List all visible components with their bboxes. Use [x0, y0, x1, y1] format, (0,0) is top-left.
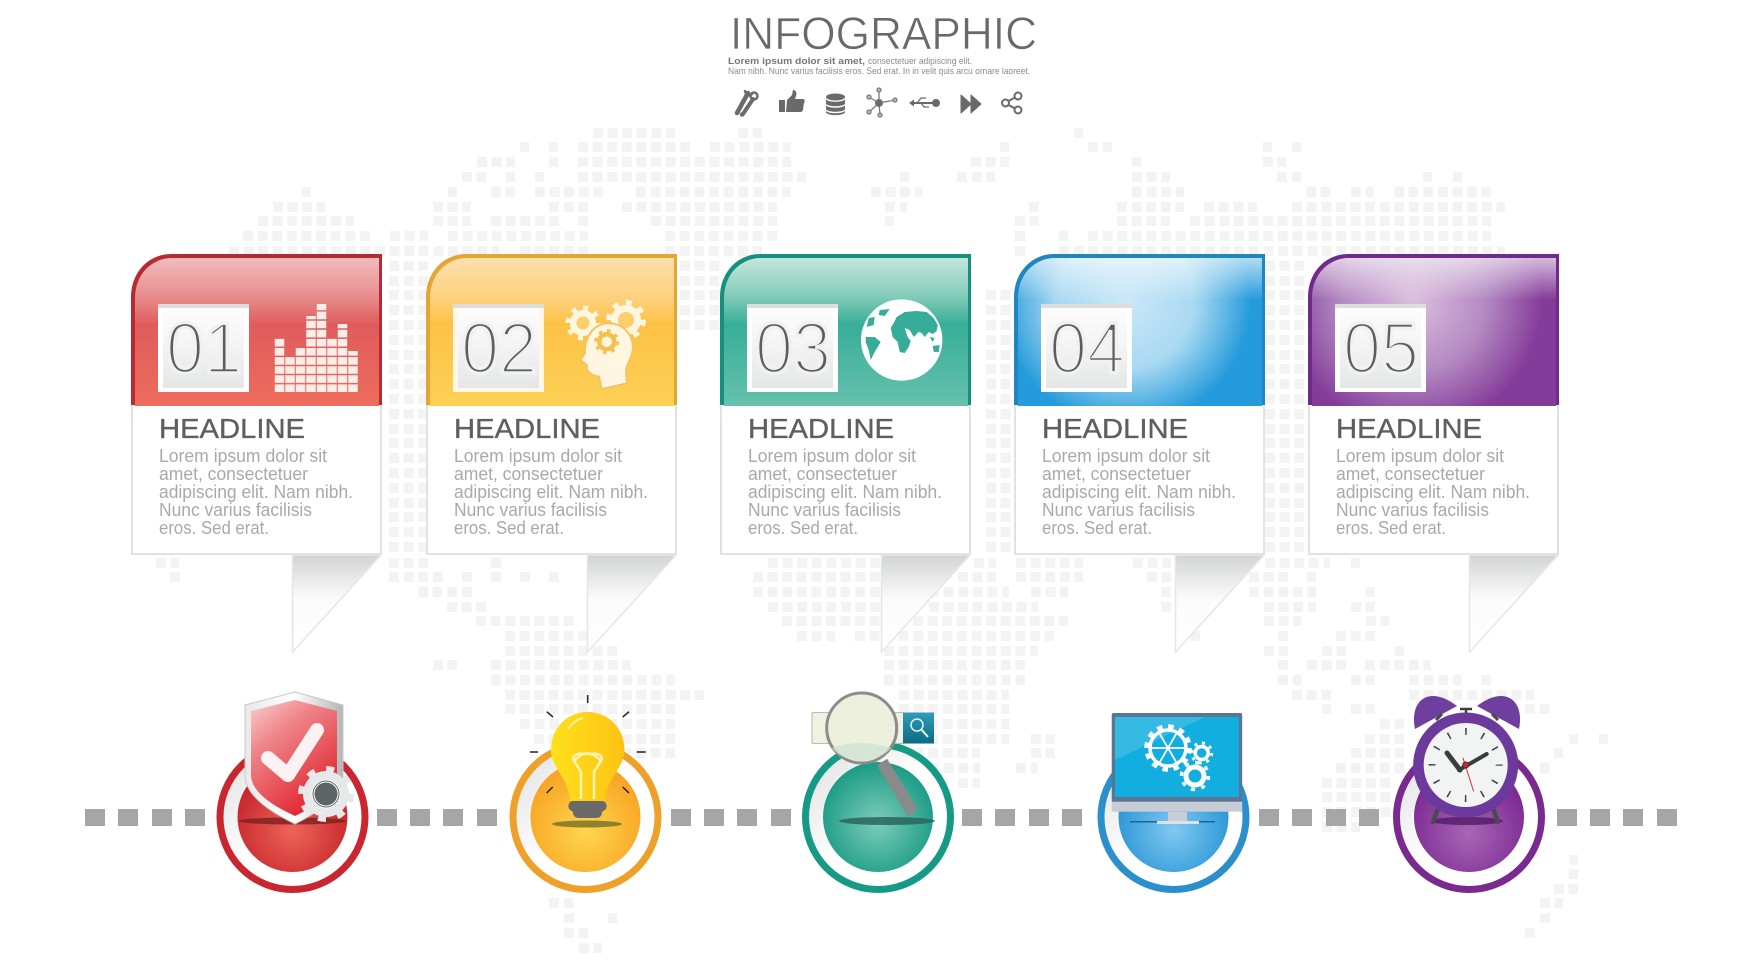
title: INFOGRAPHIC: [730, 8, 1037, 59]
body text: [454, 446, 648, 538]
body text: Lorem ipsum dolor sit: [454, 446, 622, 466]
panel 01: [131, 254, 382, 652]
icon: gear: [301, 769, 351, 819]
header: [720, 254, 971, 405]
header: [1308, 254, 1559, 405]
header: [426, 254, 677, 405]
icon: database: [826, 94, 845, 115]
node 3: magnifier: [806, 693, 950, 890]
number box: 04: [1049, 309, 1125, 389]
number box: 01: [166, 309, 242, 389]
body text: Lorem ipsum dolor sit: [159, 446, 327, 466]
icon: share: [1002, 92, 1022, 114]
headline: HEADLINE: [454, 413, 600, 444]
body text: Lorem ipsum dolor sit: [748, 446, 916, 466]
body text: amet, consectetuer: [748, 464, 897, 484]
body text: Nunc varius facilisis: [1336, 500, 1489, 520]
body text: eros. Sed erat.: [1042, 518, 1152, 538]
pointer tail: [882, 555, 970, 652]
number box: 03: [755, 309, 831, 389]
pointer tail: [1176, 555, 1264, 652]
body text: eros. Sed erat.: [1336, 518, 1446, 538]
header: [1014, 254, 1265, 405]
icon: fast forward: [961, 95, 981, 113]
node 1: shield: [220, 692, 365, 890]
icon: wrenches: [737, 91, 758, 116]
body text: adipiscing elit. Nam nibh.: [748, 482, 942, 502]
header: [131, 254, 382, 405]
dashed timeline: [85, 809, 1677, 826]
icon: clock face: [1413, 712, 1518, 818]
panel body: [427, 405, 676, 554]
headline: HEADLINE: [1042, 413, 1188, 444]
subtitle: Lorem ipsum dolor sit amet,: [728, 56, 865, 67]
panel body: [132, 405, 381, 554]
icon: magnifying glass: [827, 693, 913, 813]
headline: HEADLINE: [159, 413, 305, 444]
icon: shield with check: [245, 692, 343, 824]
panel body: [1015, 405, 1264, 554]
node 5: alarm clock: [1396, 696, 1542, 890]
icon: laptop: [1112, 713, 1242, 824]
body text: Nunc varius facilisis: [159, 500, 312, 520]
icon: rays: [530, 695, 646, 793]
body text: amet, consectetuer: [1336, 464, 1485, 484]
body text: [159, 446, 353, 538]
icon: clock bells and feet: [1414, 696, 1520, 822]
icon: screen gears: [1146, 726, 1212, 790]
icon: network: [867, 88, 897, 117]
body text: adipiscing elit. Nam nibh.: [454, 482, 648, 502]
headline: HEADLINE: [748, 413, 894, 444]
panel 03: [720, 254, 971, 652]
body text: adipiscing elit. Nam nibh.: [159, 482, 353, 502]
icon: bulb: [551, 712, 624, 818]
ring and sphere: [806, 744, 950, 890]
ring and sphere: [513, 744, 658, 890]
body text: eros. Sed erat.: [748, 518, 858, 538]
icon: bar equalizer: [280, 304, 353, 392]
panel 02: [426, 254, 677, 652]
icon: search bar: [812, 712, 934, 744]
panel 04: [1014, 254, 1265, 652]
ring and sphere: [1396, 744, 1542, 890]
icon: head with gears: [568, 302, 644, 389]
panel 05: [1308, 254, 1559, 652]
headline: HEADLINE: [1336, 413, 1482, 444]
ring and sphere: [1101, 744, 1246, 890]
body text: amet, consectetuer: [1042, 464, 1191, 484]
ring and sphere: [220, 744, 365, 890]
panel body: [1309, 405, 1558, 554]
body text: amet, consectetuer: [159, 464, 308, 484]
background: dotted world map: [156, 133, 1608, 948]
body text: amet, consectetuer: [454, 464, 603, 484]
body text: Nunc varius facilisis: [1042, 500, 1195, 520]
body text: eros. Sed erat.: [159, 518, 269, 538]
pointer tail: [1470, 555, 1558, 652]
body text: Nunc varius facilisis: [748, 500, 901, 520]
node 4: laptop: [1101, 713, 1246, 890]
title block: [728, 8, 1037, 77]
body text: adipiscing elit. Nam nibh.: [1042, 482, 1236, 502]
body text: [1042, 446, 1236, 538]
pointer tail: [292, 555, 381, 652]
panel body: [721, 405, 970, 554]
pointer tail: [588, 555, 676, 652]
body text: adipiscing elit. Nam nibh.: [1336, 482, 1530, 502]
number box: 05: [1343, 309, 1419, 389]
node 2: light bulb: [513, 695, 658, 890]
icon: usb: [909, 98, 940, 107]
icon: globe: [861, 299, 942, 381]
number box: 02: [461, 309, 537, 389]
subtitle: [728, 56, 1030, 77]
icon: clock hands: [1447, 753, 1487, 791]
subtitle: Nam nibh. Nunc varius facilisis eros. Sed erat. In in velit quis arcu ornare laoreet.: [728, 66, 1030, 77]
subtitle: consectetuer adipiscing elit.: [868, 56, 972, 67]
body text: [1336, 446, 1530, 538]
body text: Nunc varius facilisis: [454, 500, 607, 520]
top icon row: [737, 88, 1022, 117]
body text: Lorem ipsum dolor sit: [1042, 446, 1210, 466]
body text: eros. Sed erat.: [454, 518, 564, 538]
body text: [748, 446, 942, 538]
body text: Lorem ipsum dolor sit: [1336, 446, 1504, 466]
icon: thumbs up: [779, 90, 805, 112]
